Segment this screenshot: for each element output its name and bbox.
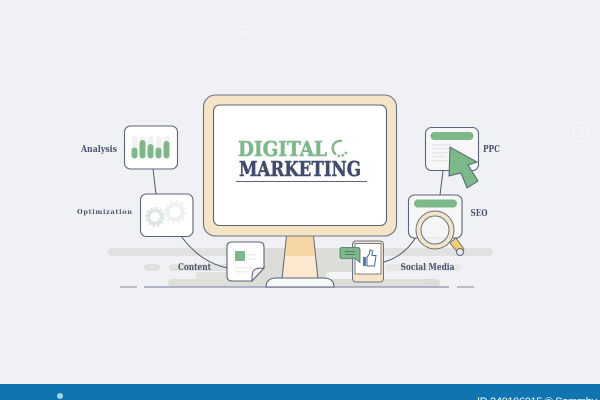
icon: cursor arrow — [449, 147, 478, 188]
icon: chat bubble — [340, 248, 360, 262]
card: content document — [227, 242, 264, 281]
icon: gears — [146, 201, 186, 226]
icon: magnifier — [416, 211, 464, 256]
icon: thumbs up — [363, 250, 376, 266]
label: ppc: PPC — [483, 145, 500, 155]
floor line — [120, 286, 474, 288]
monitor — [204, 95, 396, 236]
card: seo — [408, 195, 464, 256]
ground shadow bands — [108, 248, 493, 287]
title underline — [236, 180, 367, 182]
label: social media: Social Media — [400, 263, 455, 273]
label: optimization: Optimization — [77, 208, 132, 216]
label: analysis: Analysis — [80, 145, 117, 155]
icon: loading ring — [333, 141, 346, 156]
label: seo: SEO — [470, 209, 488, 219]
bar chart — [132, 136, 170, 158]
footer bar — [0, 384, 600, 400]
card: optimization — [140, 194, 193, 236]
monitor stand — [282, 236, 318, 279]
card: ppc — [426, 128, 478, 188]
connector lines — [153, 169, 443, 268]
footer logo mark — [57, 393, 63, 399]
monitor base — [266, 278, 334, 287]
phone — [340, 241, 384, 282]
card: analysis — [124, 126, 178, 169]
label: content: Content — [178, 263, 212, 273]
title: digital: DIGITAL — [238, 137, 327, 161]
title: marketing: MARKETING — [239, 157, 361, 181]
